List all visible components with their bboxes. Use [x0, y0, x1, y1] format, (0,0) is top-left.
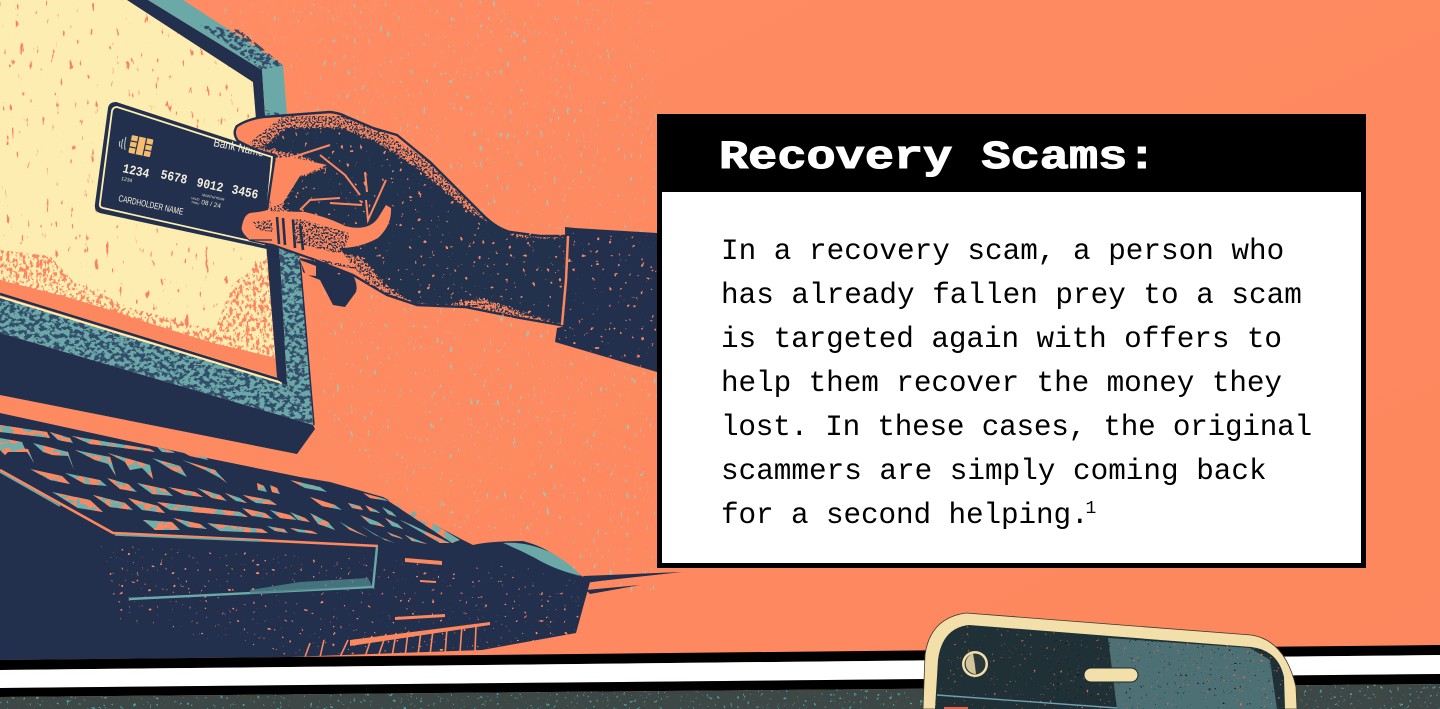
hand silhouette — [235, 112, 566, 326]
keyboard body — [0, 413, 463, 550]
screen lower shading — [0, 280, 277, 377]
phone screen specks — [935, 625, 1285, 709]
smartphone — [923, 613, 1297, 709]
card small number: 1234 — [121, 176, 133, 184]
heading: Recovery Scams: — [719, 136, 1156, 181]
card number: 1234 — [121, 161, 151, 182]
monitor frame top and right — [127, 0, 287, 384]
card expiry: THRU — [191, 200, 200, 206]
keyboard front edge — [0, 470, 378, 546]
palm orange patch — [270, 157, 327, 208]
card expiry: 08 / 24 — [201, 199, 222, 210]
phone casing — [923, 613, 1297, 709]
card number: 5678 — [159, 167, 189, 188]
monitor bezel bottom — [0, 297, 313, 425]
callout panel: recovery scams — [657, 114, 1366, 568]
shirt cuff — [555, 227, 657, 372]
hand speckle — [267, 126, 566, 326]
keys orange overlay — [0, 420, 465, 545]
desk shadow — [0, 465, 590, 660]
keys teal base — [0, 420, 465, 545]
card bank name: Bank Name — [212, 135, 265, 160]
phone camera — [962, 651, 988, 677]
desk streaks — [350, 558, 490, 646]
card expiry: MONTH/YEAR — [202, 193, 225, 202]
mouse cable — [583, 572, 682, 594]
contactless icon — [120, 137, 126, 150]
card number: 3456 — [230, 182, 260, 203]
lower finger — [300, 258, 357, 307]
phone speaker — [1084, 668, 1138, 682]
phone glass — [935, 625, 1285, 709]
background paint specks — [190, 0, 660, 600]
monitor front edge — [0, 333, 315, 454]
thumb — [242, 205, 391, 266]
lower panel background — [0, 684, 1440, 709]
mouse highlight — [503, 543, 581, 576]
bottom stripes — [0, 645, 1440, 709]
monitor screen — [0, 0, 277, 377]
finger crease lines — [290, 145, 386, 220]
phone screen edge — [937, 695, 1117, 708]
card number: 9012 — [195, 175, 225, 196]
card expiry — [191, 193, 225, 210]
panel body — [662, 192, 1361, 563]
hand stippled shading — [262, 128, 566, 326]
card expiry: VALID — [191, 196, 201, 202]
card body — [96, 103, 275, 248]
card chip — [128, 135, 154, 157]
credit card — [96, 103, 275, 248]
phone glass reflection — [1108, 638, 1277, 709]
card holder name: CARDHOLDER NAME — [118, 193, 184, 217]
hand dark shading — [262, 128, 566, 326]
computer monitor — [0, 0, 320, 454]
keyboard and desk — [0, 413, 682, 660]
card number — [121, 161, 260, 203]
body text: In a recovery scam, a person who has already fallen prey to a scam is targeted again with offers to help them recover the money they lost. In these cases, the original scammers are simply coming back for a second helping.1 — [721, 235, 1312, 532]
hand and sleeve — [235, 112, 660, 375]
desk hatch streaks — [305, 625, 476, 657]
